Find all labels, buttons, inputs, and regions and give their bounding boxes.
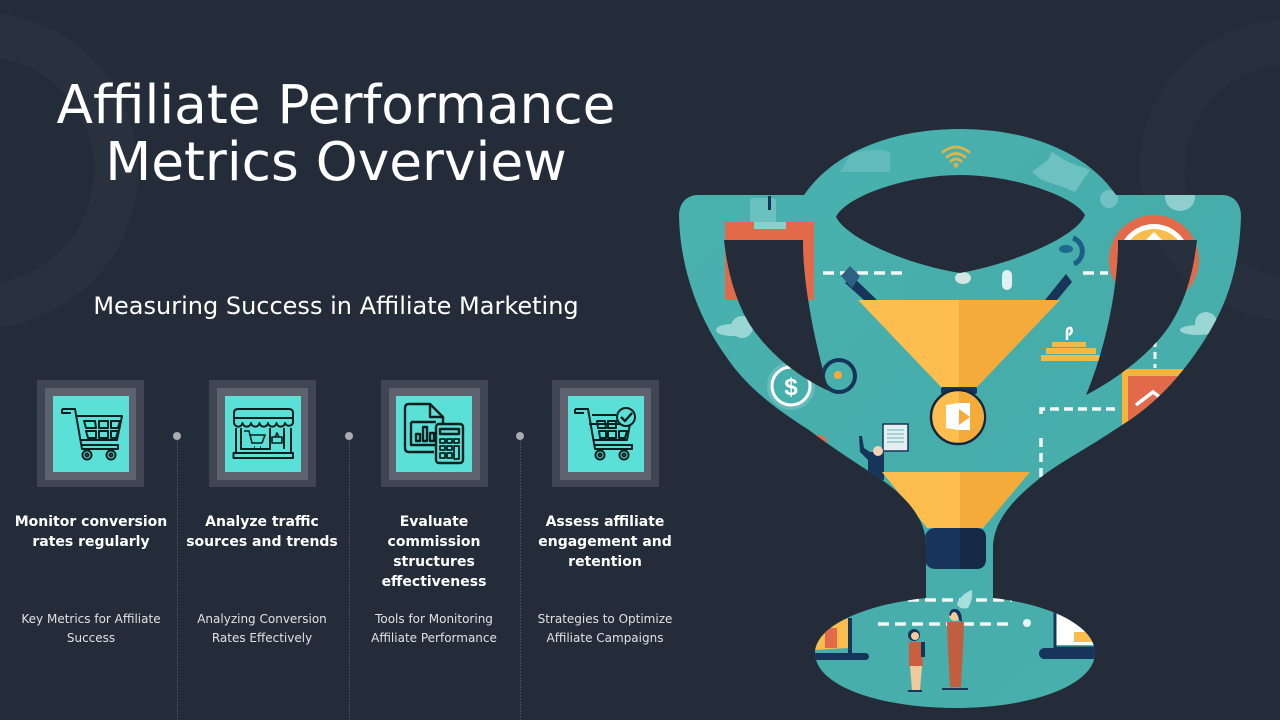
icon: dollar ring [767, 362, 815, 410]
person: woman in skirt [908, 629, 925, 692]
trophy illustration [670, 120, 1250, 720]
right monitor [1039, 612, 1100, 659]
title [56, 73, 615, 193]
icon: coin badge [1109, 215, 1199, 292]
step 3 heading: effectiveness [382, 574, 486, 590]
icon: funnel play badge [931, 390, 985, 444]
icon: lightbulb ring [823, 360, 855, 392]
icon: clipboard [725, 196, 814, 300]
icon: shopping cart [37, 380, 144, 487]
step 3 heading [382, 514, 486, 590]
icon: coin stack [1041, 328, 1104, 361]
small red badge [816, 435, 827, 444]
pale clouds [716, 312, 1217, 338]
icon: small badges [955, 238, 1082, 290]
step 3 heading: structures [393, 554, 475, 570]
step 1 heading: Monitor conversion rates regularly [15, 514, 167, 550]
step 3 heading: Evaluate [400, 514, 468, 530]
icon: megaphones [841, 266, 1072, 300]
icon: wifi [943, 147, 969, 166]
connector 1 [173, 432, 181, 720]
icon: red chart panel [1122, 369, 1184, 425]
dashed lines: lower [878, 600, 1012, 624]
step 2 heading: Analyze traffic sources and trends [186, 514, 338, 550]
step 2 caption: Analyzing Conversion Rates Effectively [197, 612, 327, 645]
step 3 heading: commission [388, 534, 480, 550]
funnel spout [925, 528, 986, 569]
connector 3 [516, 432, 524, 720]
background ring: left [0, 34, 116, 306]
title: Metrics Overview [105, 130, 567, 193]
dashed lines: upper [823, 273, 1155, 478]
step 4 heading: Assess affiliate engagement and retention [538, 514, 672, 570]
icon: dollar ring: $ [784, 374, 798, 401]
funnel lower [882, 472, 1030, 528]
background ring: right [1162, 42, 1280, 298]
icon: storefront [209, 380, 316, 487]
pale drop and dot [957, 590, 1031, 627]
connector 2 [345, 432, 353, 720]
person with document [859, 424, 908, 480]
step 4 caption: Strategies to Optimize Affiliate Campaigns [538, 612, 672, 645]
decorative pale shapes: top [750, 150, 1195, 224]
title: Affiliate Performance [57, 73, 615, 136]
icon: report and calculator [381, 380, 488, 487]
step 3 caption: Tools for Monitoring Affiliate Performance [371, 612, 497, 645]
icon: cart with checkmark [552, 380, 659, 487]
funnel upper [858, 300, 1060, 394]
step 1 caption: Key Metrics for Affiliate Success [21, 612, 161, 645]
subtitle: Measuring Success in Affiliate Marketing [93, 292, 579, 320]
person: woman in jumpsuit [942, 609, 968, 690]
left monitor [810, 618, 869, 660]
